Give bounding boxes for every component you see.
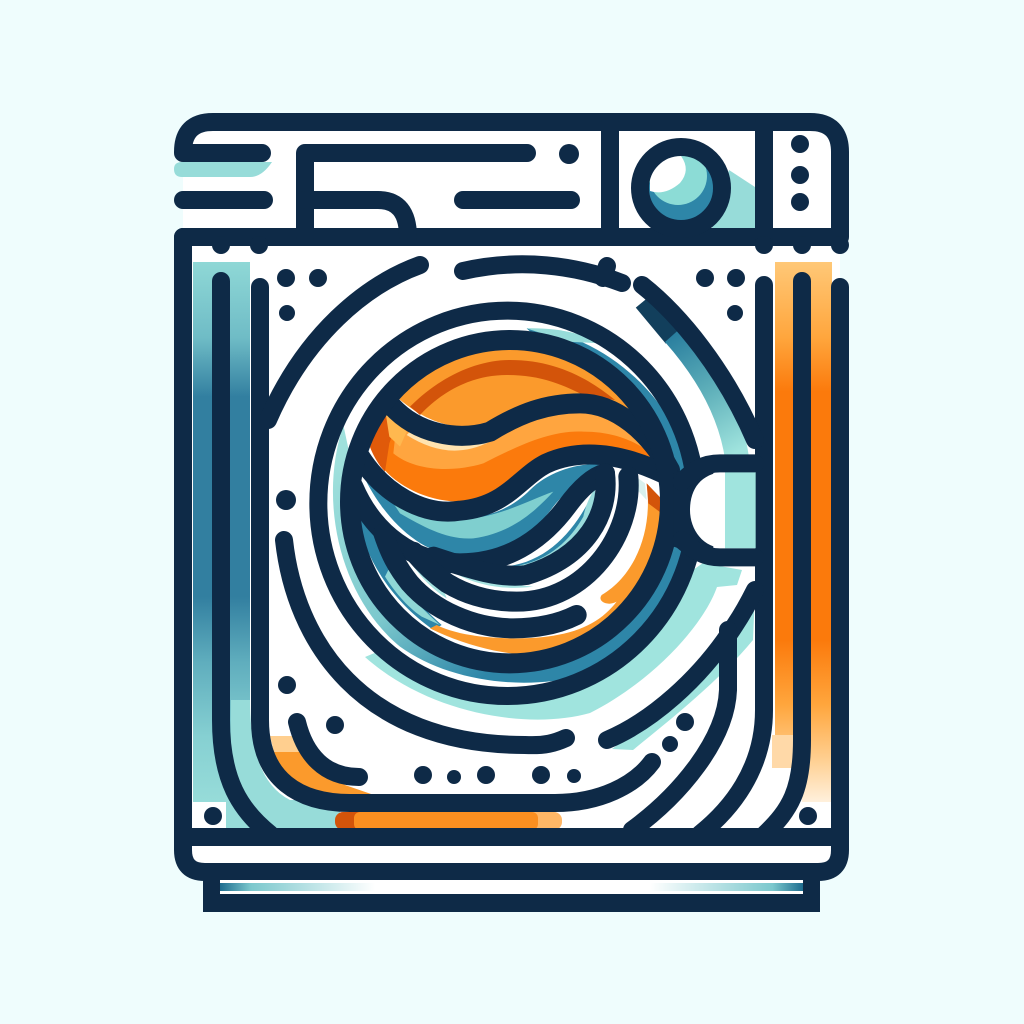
hook curve lower left bbox=[297, 722, 359, 777]
band upper right bbox=[527, 328, 688, 500]
panel outline bbox=[183, 122, 840, 237]
arc band: blue to teal bbox=[645, 300, 737, 458]
swirl lines bbox=[392, 403, 670, 470]
band inside lower left bbox=[357, 513, 442, 630]
outer door arcs bbox=[268, 264, 755, 830]
band lower left bbox=[333, 425, 687, 683]
dividers bbox=[601, 122, 619, 237]
handle bbox=[673, 460, 756, 558]
feet bbox=[203, 876, 820, 912]
base bbox=[183, 837, 840, 912]
outer ring bbox=[318, 311, 696, 696]
pale fade between lines bbox=[772, 735, 802, 768]
dots: scattered body rivets bbox=[204, 236, 849, 825]
drum interior white bbox=[350, 340, 670, 663]
teal halo below door bbox=[365, 563, 742, 720]
teal knob shadow bbox=[712, 170, 755, 228]
indicator dot bbox=[559, 144, 579, 164]
white lower-right corner bbox=[772, 802, 832, 829]
orange crescent bbox=[430, 483, 662, 655]
orange wave bbox=[369, 412, 660, 502]
panel dots bbox=[791, 135, 809, 211]
white lower-left corner bbox=[193, 802, 226, 829]
left control bar bbox=[183, 191, 264, 209]
teal sliver under lower right arc bbox=[612, 593, 755, 750]
right body outlines bbox=[831, 287, 849, 837]
inner ring bbox=[350, 340, 670, 663]
left body outlines bbox=[174, 237, 192, 837]
door white disc bbox=[317, 310, 697, 697]
icon: knob bbox=[640, 147, 722, 229]
bottom orange stripe bbox=[335, 812, 562, 830]
panel: control panel bbox=[174, 122, 840, 237]
blue wave bbox=[362, 464, 600, 555]
wedge bbox=[503, 488, 595, 567]
panel: door (traced at 3x) bbox=[317, 310, 756, 697]
base plate bbox=[183, 837, 840, 872]
teal wave bbox=[393, 492, 553, 538]
orange top bbox=[398, 348, 633, 427]
teal accent under left bar bbox=[174, 162, 272, 177]
dots near lower right arc bbox=[662, 713, 694, 752]
slider bbox=[463, 191, 571, 209]
teal lower wedge bbox=[222, 700, 340, 830]
second body line with orange accents bbox=[260, 287, 652, 803]
teal slivers bbox=[410, 562, 447, 598]
panel: machine body bbox=[183, 237, 840, 837]
white fade between lines bbox=[772, 768, 802, 810]
display outline bbox=[305, 153, 527, 237]
orange side stripe bbox=[775, 262, 832, 802]
blue side stripe bbox=[193, 262, 250, 802]
